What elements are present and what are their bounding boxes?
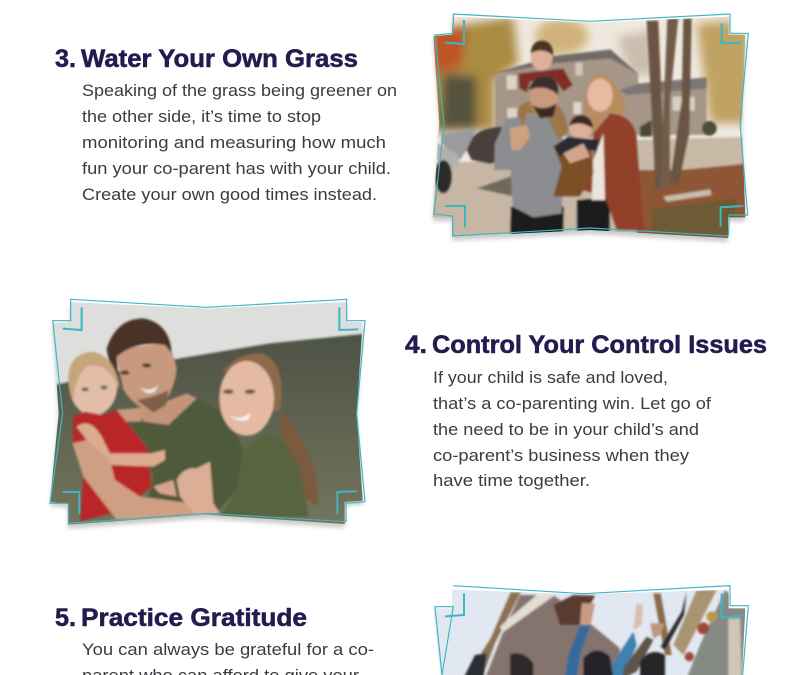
corner marks [445,20,743,227]
body text: section 3: monitoring and measuring how much [82,133,386,152]
frame outline [434,14,748,236]
body text: section 4: that’s a co-parenting win. Let go of [433,394,711,413]
body text: section 3: Speaking of the grass being greener on [82,81,397,100]
heading: 3. Water Your Own Grass: 3. [55,45,76,73]
heading: 5. Practice Gratitude: 5. [55,604,76,632]
body text: section 4: the need to be in your child’s and [433,420,699,439]
body text: section 5 [82,640,374,675]
corner marks [63,307,358,514]
body text: section 4: If your child is safe and loved, [433,368,668,387]
body text: section 3: the other side, it’s time to stop [82,107,321,126]
body text: section 4: co-parent’s business when they [433,446,690,465]
heading: 3. Water Your Own Grass: Water Your Own Grass [81,45,358,73]
body text: section 3: Create your own good times instead. [82,185,377,204]
section 3: water your own grass [55,10,753,243]
body text: section 5: You can always be grateful for a co- [82,640,374,659]
heading: 4. Control Your Control Issues: 4. [405,331,427,359]
frame outline [50,299,365,523]
body text: section 4 [433,368,711,490]
frame outline [435,586,748,675]
body text: section 4: have time together. [433,471,590,490]
photo: family in autumn yard [430,10,753,243]
photo: parents holding toddler [47,297,370,530]
body text: section 3 [82,81,397,204]
photo: people on a fairground ride [430,585,753,675]
section 4: control your control issues [47,297,767,530]
body text: section 3: fun your co-parent has with your child. [82,159,391,178]
heading: 4. Control Your Control Issues: Control Your Control Issues [432,331,767,359]
corner marks [445,593,742,618]
section 5: practice gratitude [55,585,753,675]
heading: 5. Practice Gratitude: Practice Gratitude [81,604,307,632]
